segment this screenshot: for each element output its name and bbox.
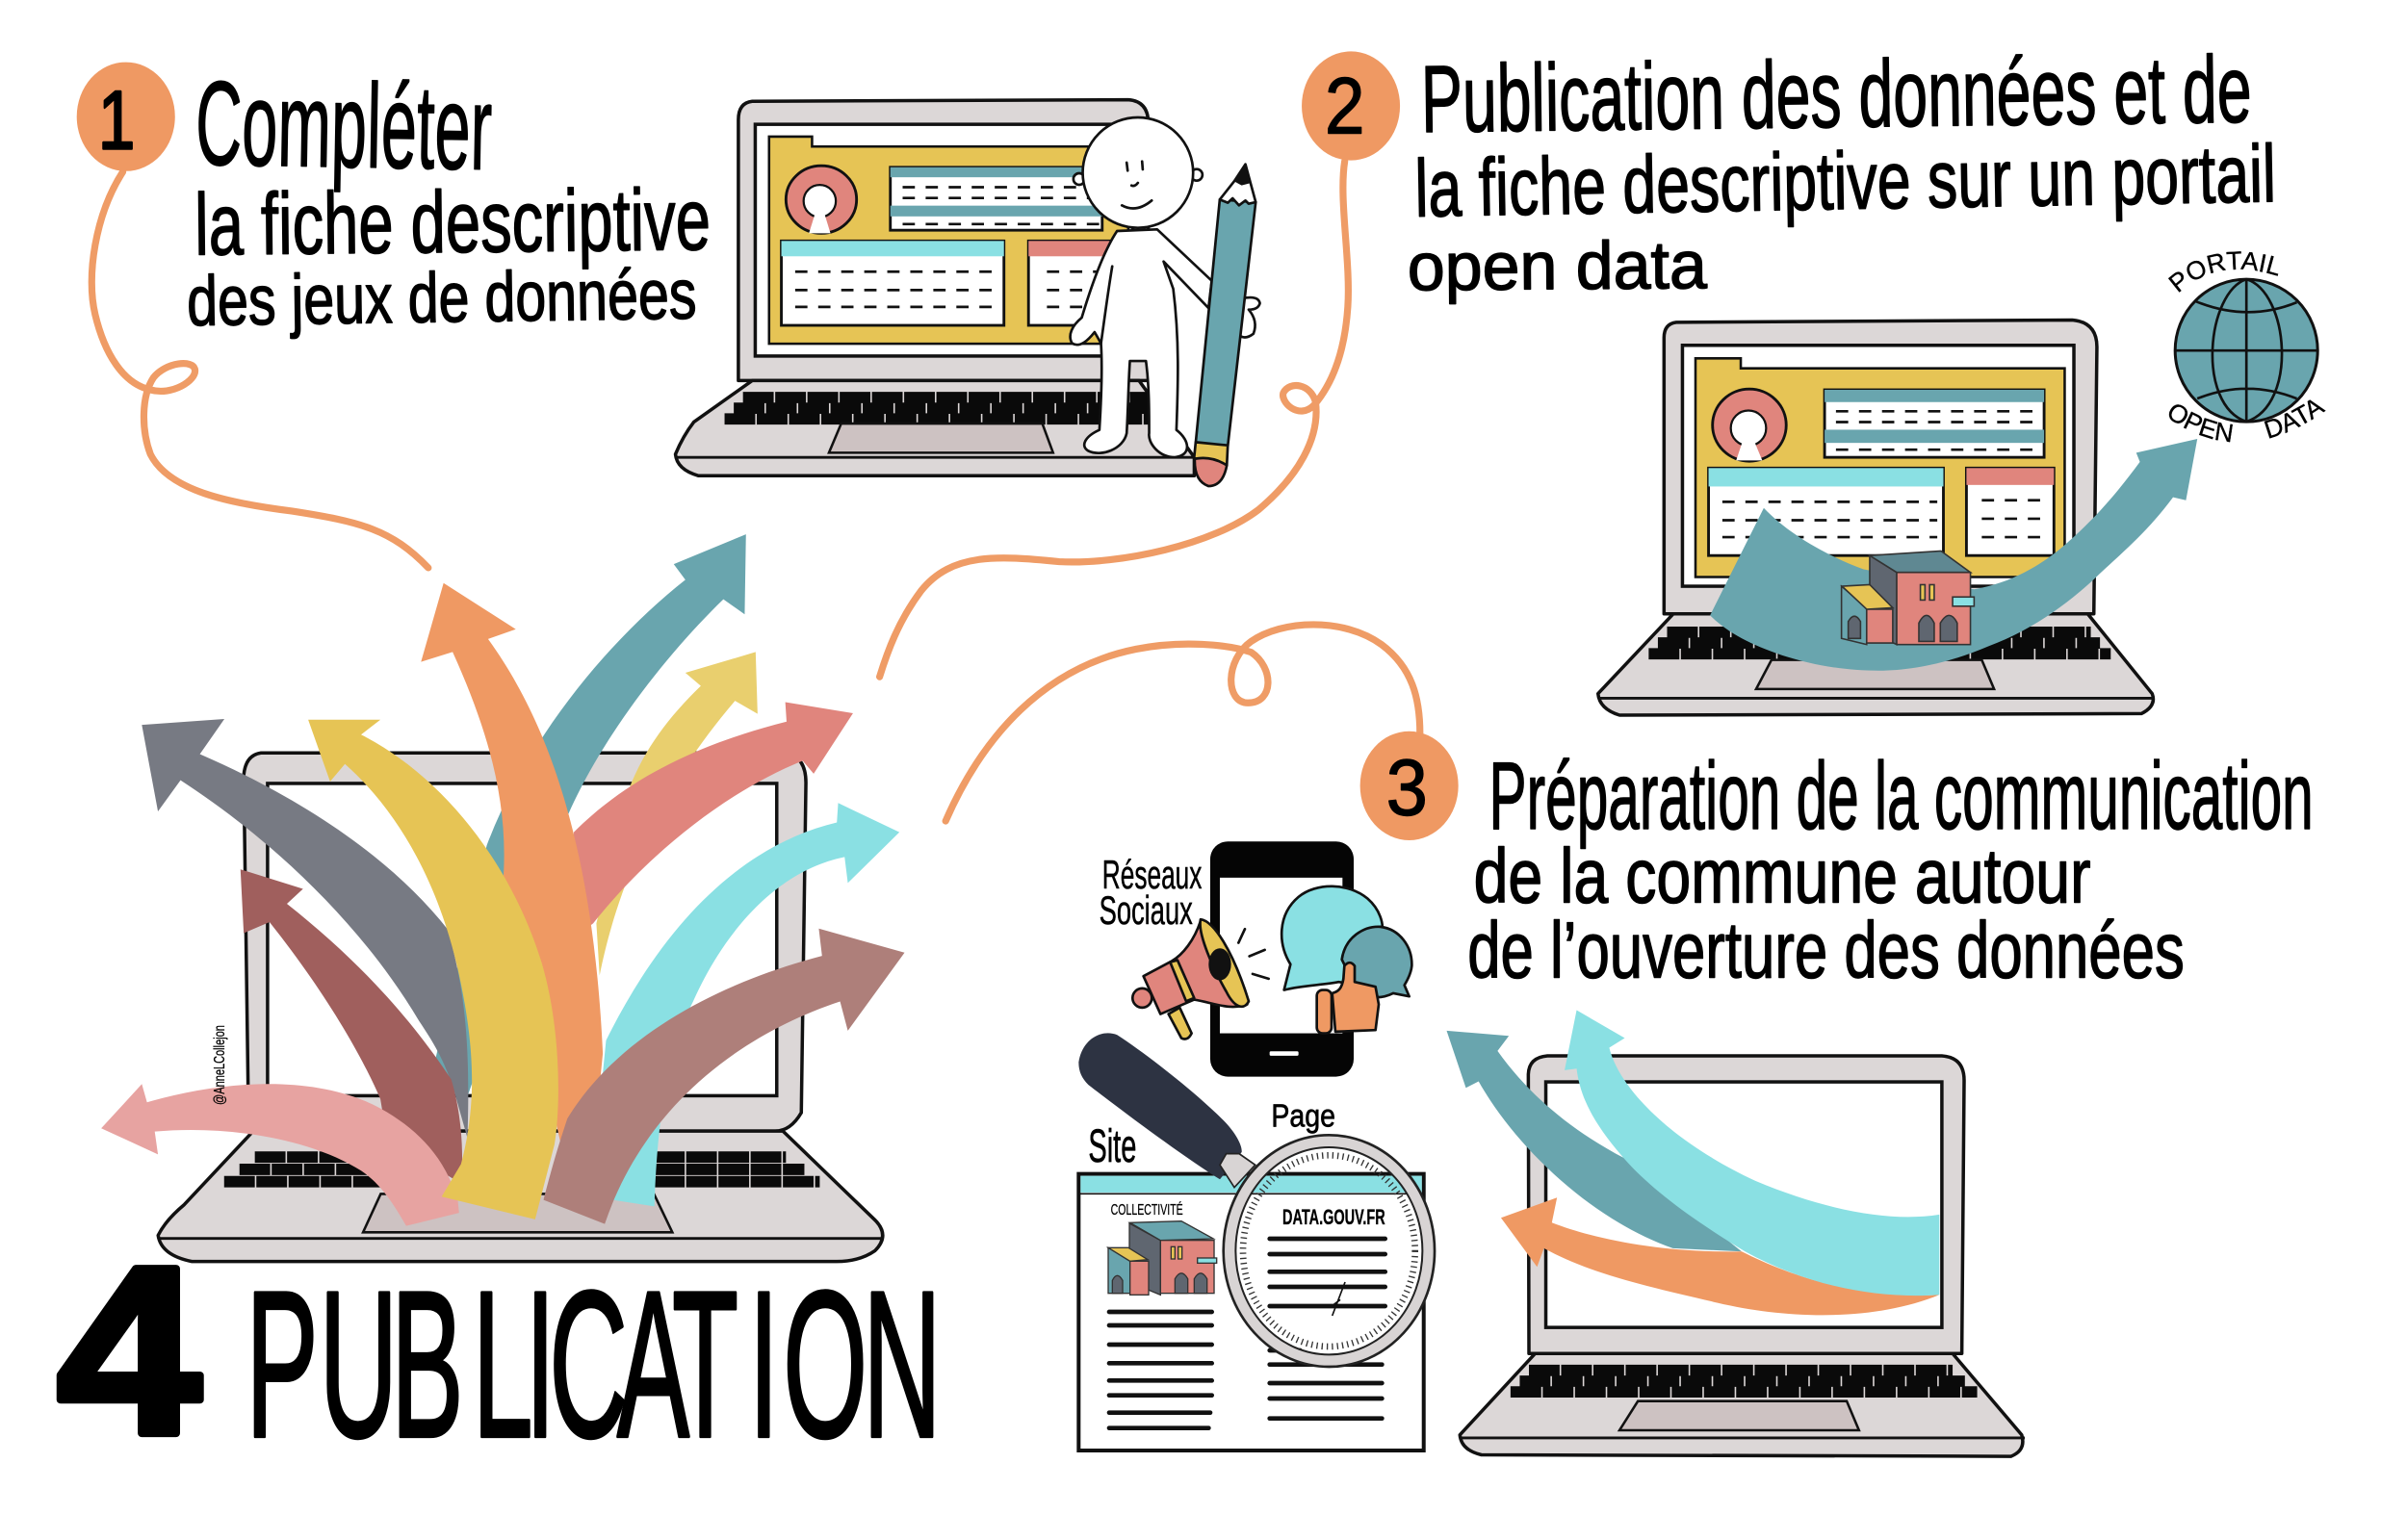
lens text lines xyxy=(1270,1239,1385,1306)
laptop 4 screen xyxy=(244,753,806,1131)
megaphone xyxy=(1132,919,1269,1040)
laptop 4 base xyxy=(158,1131,883,1262)
page label: Page xyxy=(1271,1098,1335,1134)
number 4: 4 xyxy=(57,1217,201,1484)
laptop 2 screen xyxy=(1664,320,2097,614)
arrows leaving laptop 3 xyxy=(1447,1011,1939,1315)
step 1 number badge: 1 xyxy=(98,75,135,167)
step 1 heading xyxy=(187,57,711,341)
social networks label xyxy=(1100,852,1203,933)
step 3 number badge: 3 xyxy=(1386,743,1428,833)
character head xyxy=(1074,173,1085,185)
site page and magnifying glass xyxy=(1078,1033,1435,1450)
orange arrow xyxy=(421,583,603,1144)
character body xyxy=(1071,229,1212,457)
laptop 2 with form xyxy=(1598,320,2197,715)
cyan arrow xyxy=(1565,1011,1939,1296)
page frame xyxy=(1078,1174,1424,1450)
magnifier ferrule xyxy=(1220,1154,1255,1188)
orange arrow xyxy=(1501,1197,1939,1315)
text lines xyxy=(1109,1312,1382,1428)
grey arrow xyxy=(142,719,468,1138)
arrow to portal xyxy=(1710,439,2197,671)
social networks label: Sociaux xyxy=(1100,887,1193,933)
step 3 number badge xyxy=(1360,732,1459,840)
open data label: OPEN DATA xyxy=(2168,399,2326,443)
portail label: PORTAIL xyxy=(2168,251,2278,293)
light yellow arrow xyxy=(596,652,758,975)
globe: portail open data xyxy=(2168,251,2326,443)
character and pencil xyxy=(1071,117,1260,486)
magnifier handle xyxy=(1078,1033,1242,1179)
step 2 heading: open data xyxy=(1408,226,1708,304)
yellow arrow xyxy=(308,720,558,1219)
laptop 3 xyxy=(1460,1056,2025,1456)
connector: step 2 to arrows xyxy=(880,161,1348,677)
thumbs up xyxy=(1317,962,1379,1034)
site label: Site xyxy=(1088,1120,1136,1172)
salmon arrow xyxy=(567,702,853,943)
laptop 4 xyxy=(158,753,883,1262)
light pink arrow xyxy=(101,1084,459,1226)
step 1 number badge xyxy=(77,63,175,171)
pencil body xyxy=(1196,199,1255,446)
speech bubbles xyxy=(1281,886,1411,997)
step 1 heading: des jeux de données xyxy=(187,255,697,341)
teal arrow xyxy=(1447,1031,1742,1251)
social networks label: Réseaux xyxy=(1102,852,1203,897)
publication: PUBLICATION xyxy=(246,1248,942,1481)
laptop 2 base xyxy=(1598,614,2154,715)
step 3 heading: de l’ouverture des données xyxy=(1467,906,2185,995)
burst of coloured arrows xyxy=(101,534,905,1226)
step 3 heading: de la commune autour xyxy=(1474,834,2091,919)
trackpad xyxy=(363,1194,672,1232)
main title xyxy=(57,1217,942,1484)
phone with social icons xyxy=(1132,841,1411,1077)
step 3 heading xyxy=(1467,743,2314,995)
connector: step 1 to arrows xyxy=(91,172,428,568)
step 2 number badge: 2 xyxy=(1325,62,1364,151)
author credit: @AnneLCollejon xyxy=(212,1025,228,1105)
laptop 1 base xyxy=(676,380,1194,475)
laptop 1 with form and character xyxy=(676,100,1260,486)
character hand behind pencil xyxy=(1239,297,1260,338)
brown arrow xyxy=(544,929,905,1224)
collectivite label: COLLECTIVITÉ xyxy=(1111,1202,1183,1219)
cyan arrow xyxy=(600,803,899,1206)
dark red arrow xyxy=(241,869,462,1184)
data.gouv.fr label: DATA.GOUV.FR xyxy=(1282,1205,1385,1229)
lens xyxy=(1224,1135,1435,1367)
connector: step 3 to arrows xyxy=(945,625,1420,821)
building xyxy=(1842,551,1974,645)
small building xyxy=(1108,1221,1217,1295)
step 2 heading xyxy=(1408,37,2277,304)
step 1 heading: Compléter xyxy=(194,57,493,195)
laptop 1 screen xyxy=(738,100,1149,380)
step 1 heading: la fiche descriptive xyxy=(194,171,711,274)
step 2 number badge xyxy=(1302,51,1400,161)
teal arrow xyxy=(435,534,746,1106)
phone xyxy=(1210,841,1354,1077)
